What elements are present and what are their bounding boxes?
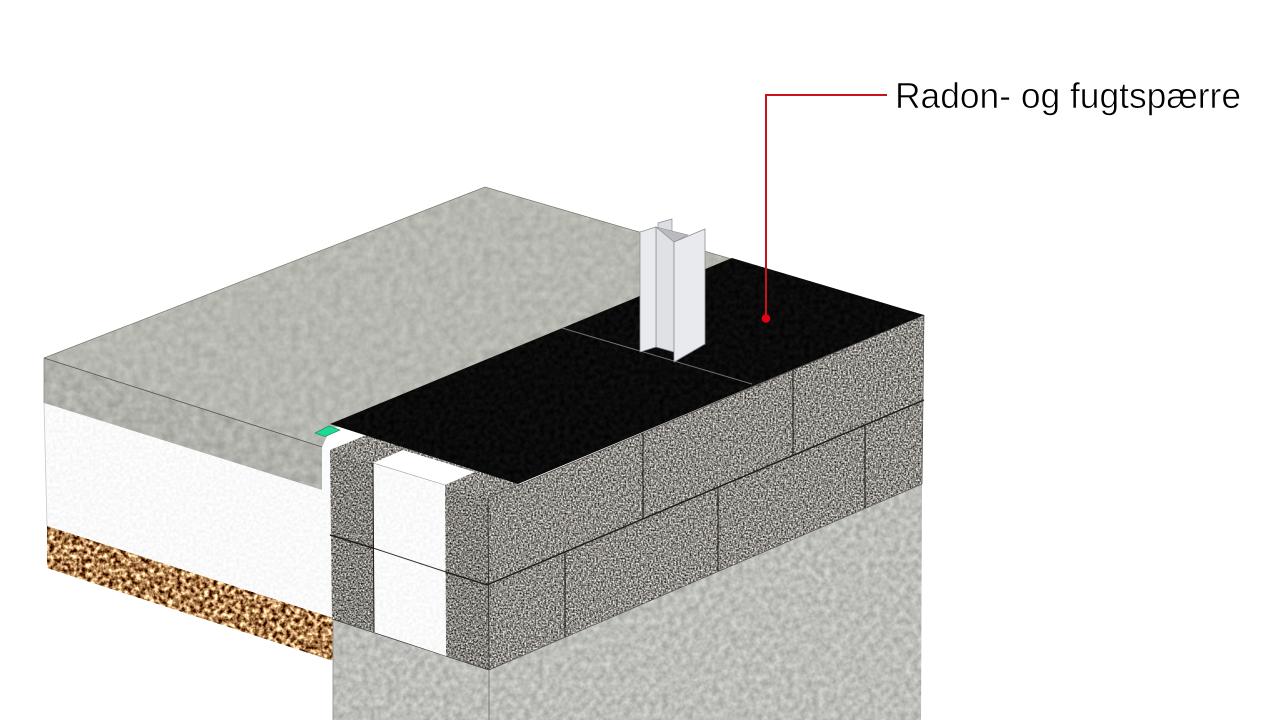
insulation strip in block wall [373,450,475,656]
steel column [640,219,705,362]
gravel layer [47,526,333,661]
lightweight concrete block wall [330,315,924,670]
label: Radon- og fugtspærre: Radon- og fugtspærre [895,75,1241,116]
concrete foundation wall [333,484,922,720]
floor insulation: white EPS layer [44,403,363,618]
floor slab: concrete [44,187,735,490]
radon and moisture barrier: black membrane [330,258,924,484]
callout: leader line with dot [762,95,887,323]
green membrane tab [315,426,340,436]
